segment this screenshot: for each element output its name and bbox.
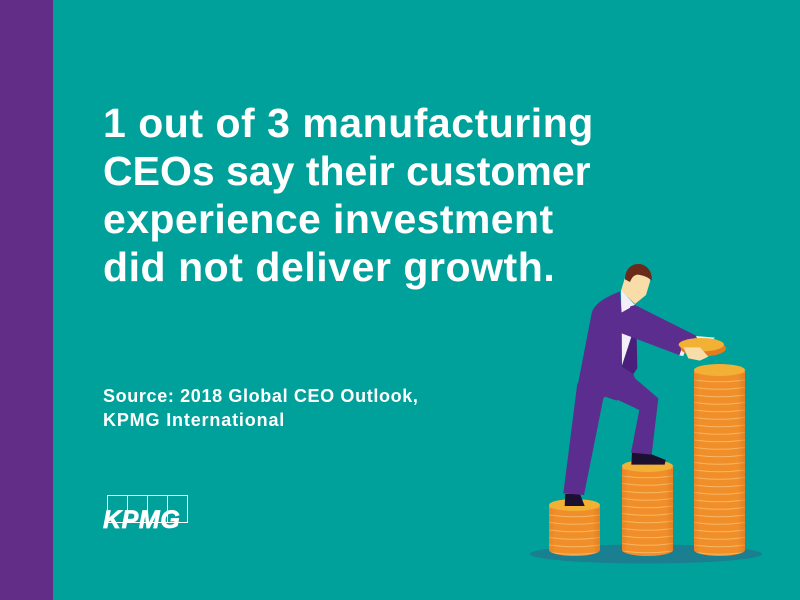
front leg — [617, 377, 658, 455]
held coin — [681, 340, 726, 356]
title: CEOs say their customer — [103, 148, 591, 194]
left coin stack — [549, 499, 600, 556]
purple side band — [0, 0, 53, 600]
title: did not deliver growth. — [103, 244, 555, 290]
KPMG logo — [103, 495, 188, 534]
right coin stack — [694, 364, 745, 556]
source text — [103, 386, 419, 430]
jacket and arm — [577, 291, 635, 401]
title — [103, 100, 594, 290]
neck and face — [621, 270, 651, 304]
KPMG logo: KPMG — [103, 506, 180, 534]
hair — [625, 264, 652, 282]
hand — [683, 347, 708, 361]
ground shadow — [530, 544, 762, 564]
source text: Source: 2018 Global CEO Outlook, — [103, 386, 419, 406]
tie — [622, 305, 637, 375]
source text: KPMG International — [103, 410, 285, 430]
title: 1 out of 3 manufacturing — [103, 100, 594, 146]
shirt — [621, 290, 636, 367]
back leg — [563, 383, 617, 495]
man — [563, 264, 726, 506]
far hand and cuff — [696, 336, 715, 341]
middle coin stack — [622, 460, 673, 556]
shoes — [565, 494, 585, 506]
title: experience investment — [103, 196, 554, 242]
